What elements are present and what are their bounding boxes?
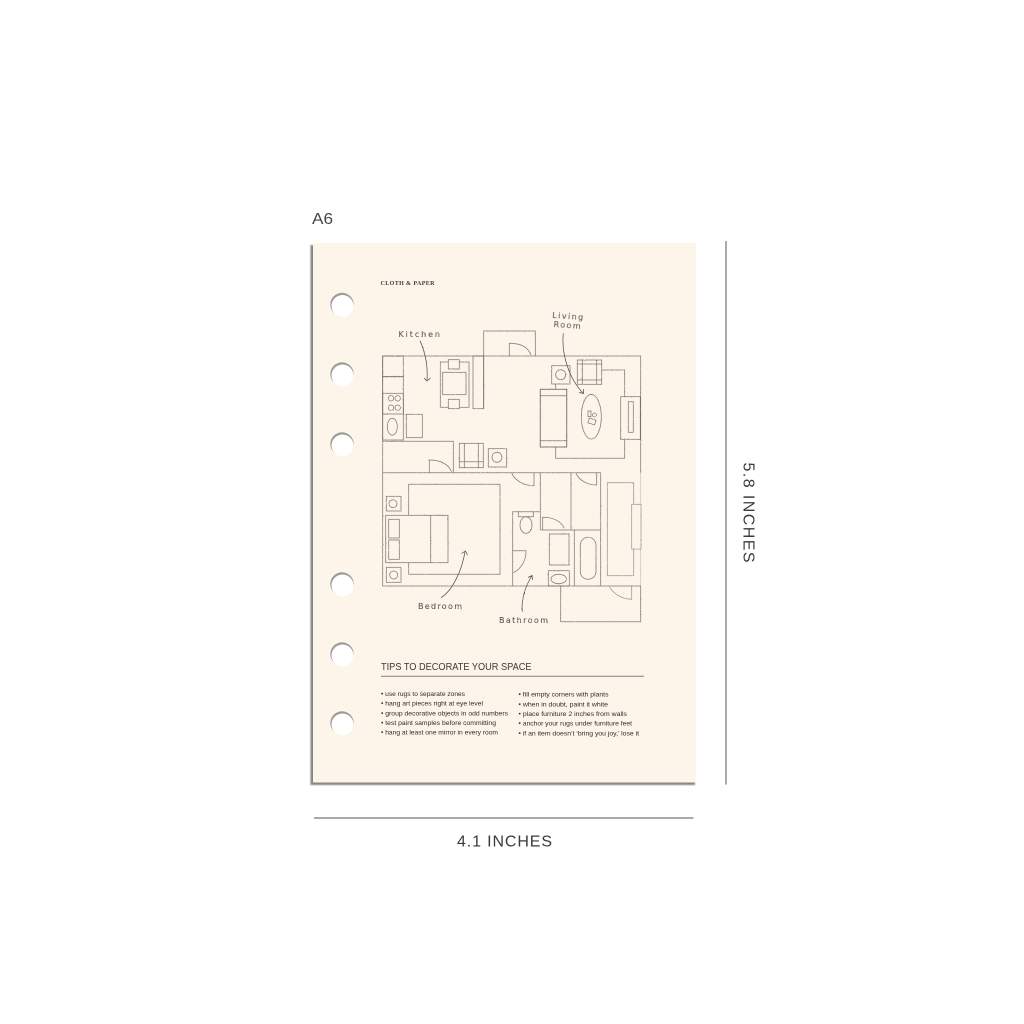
tips list: left column: • use rugs to separate zones [381,691,465,698]
tips list: right column [518,692,639,738]
label: Kitchen [398,330,440,381]
bathroom fixtures [512,473,597,586]
tips list: right column: • when in doubt, paint it white [518,702,609,708]
label: Bedroom [418,551,468,611]
label: Bedroom: Bedroom [418,602,462,611]
arrow: living room [563,333,584,394]
floor plan [383,331,641,622]
height dimension line [726,241,727,784]
width dimension line [314,818,694,819]
label: Bathroom: Bathroom [499,616,548,625]
width label: 4.1 INCHES [457,834,552,850]
label: Living Room: Room [553,320,581,331]
panel: A6 paper page [310,243,696,785]
outer walls and partitions [383,356,641,622]
tips list: left column: • hang at least one mirror in every room [381,730,498,736]
dining table and chairs [440,360,469,409]
balcony furniture and door [607,483,641,599]
faint right wall [640,473,642,586]
tips list: left column: • hang art pieces right at eye level [381,700,483,708]
bedroom furniture [386,484,500,582]
tips list: right column: • if an item doesn’t ‘bring you joy,’ lose it [518,730,639,738]
brand name: CLOTH & PAPER [380,281,435,287]
tips list: left column: • group decorative objects in odd numbers [381,710,508,718]
label: Living Room: Living [552,311,584,322]
tips list: left column [381,691,508,736]
arrow: bedroom [441,551,468,598]
heading: tips: TIPS TO DECORATE YOUR SPACE [381,662,532,673]
label: Living Room [551,311,584,331]
tips list: right column: • anchor your rugs under furniture feet [518,720,632,728]
binder holes [330,293,354,736]
arrow: kitchen [420,341,430,381]
height label: 5.8 INCHES [740,462,756,562]
label: Kitchen: Kitchen [398,330,440,339]
label: Bathroom [499,576,548,625]
heading rule [381,675,644,678]
kitchen fixtures [383,356,484,440]
arrow: bathroom [522,576,532,612]
entry alcove and door [484,331,535,409]
hallway door, armchair and plant [429,443,507,473]
tips list: right column: • place furniture 2 inches from walls [518,711,627,718]
living room furniture [540,360,640,458]
tips list: right column: • fill empty corners with plants [518,692,608,698]
tips list: left column: • test paint samples before committing [381,720,497,727]
size label: A6: A6 [312,211,333,228]
